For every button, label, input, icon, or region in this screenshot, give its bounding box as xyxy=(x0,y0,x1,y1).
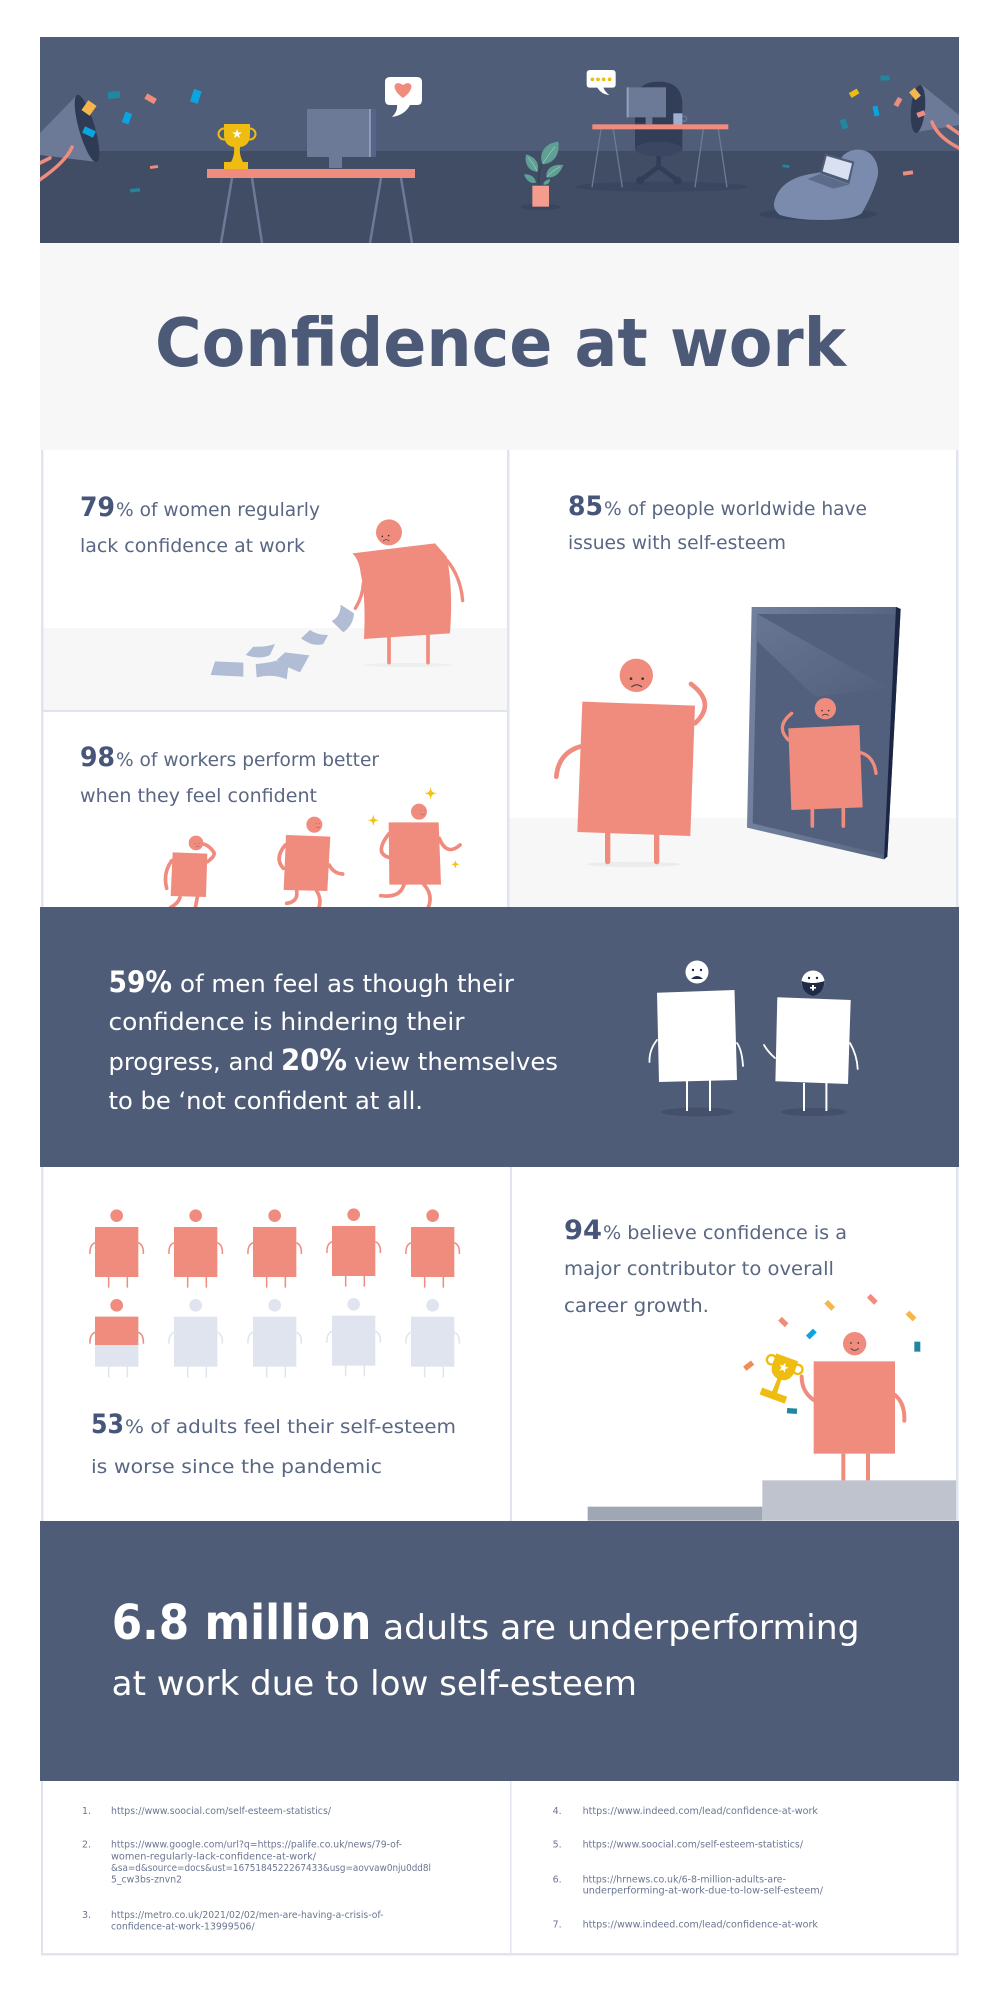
man with beard xyxy=(764,970,858,1116)
stat text: 85%: % of people worldwide have xyxy=(604,498,867,520)
panel: 98% of workers xyxy=(43,712,507,907)
stat text: 79% xyxy=(80,492,320,557)
references left column xyxy=(82,1806,431,1933)
podium xyxy=(588,1480,956,1521)
figures: three growing characters xyxy=(165,788,460,907)
mirror xyxy=(747,607,901,859)
stat text: 53%: % of adults feel their self-esteem xyxy=(125,1416,456,1438)
stat text: 79%: 79 xyxy=(80,492,115,523)
stat text: 6.8 million: adults are underperforming xyxy=(383,1608,860,1648)
second desk with chair xyxy=(592,82,728,188)
references left column: 3. xyxy=(82,1910,91,1921)
stat text: 98%: 98 xyxy=(80,742,115,773)
banner: office illustration xyxy=(38,37,961,243)
panel: title xyxy=(40,243,959,450)
stat text: 53% xyxy=(91,1409,456,1478)
panel: references xyxy=(41,1781,958,1956)
stat text: 59% and 20%: to be ‘not confident at all. xyxy=(108,1087,423,1115)
references right column: https://www.soocial.com/self-esteem-statistics/ xyxy=(583,1840,804,1851)
confetti xyxy=(743,1294,920,1414)
stat text: 59% and 20%: confidence is hindering their xyxy=(108,1008,465,1036)
title: Confidence at work xyxy=(155,304,847,382)
stat text: 79%: % of women regularly xyxy=(116,499,320,521)
stat text: 94%: career growth. xyxy=(564,1295,709,1317)
references left column: 5_cw3bs-znvn2 xyxy=(111,1875,182,1886)
stat text: 6.8 million: at work due to low self-esteem xyxy=(112,1664,637,1704)
references right column: 6. xyxy=(553,1874,562,1885)
stat text: 79%: lack confidence at work xyxy=(80,535,305,557)
panel: 79% of women xyxy=(43,450,507,710)
beanbag with laptop xyxy=(759,150,878,220)
figure: small xyxy=(165,836,214,907)
dividers row 1 xyxy=(41,450,958,907)
desk xyxy=(207,169,415,243)
figure: dropping papers xyxy=(211,519,463,679)
stat text: 85%: 85 xyxy=(568,491,603,522)
stat text: 6.8 million xyxy=(112,1595,860,1704)
icon: left party popper xyxy=(40,94,100,182)
dividers row 2 xyxy=(41,1167,958,1521)
icon: plant and second desk and beanbag xyxy=(521,70,878,220)
stat text: 59% and 20%: progress, and xyxy=(108,1048,274,1076)
references left column: 1. xyxy=(82,1806,91,1817)
references right column: 5. xyxy=(553,1840,562,1851)
stat text: 53%: is worse since the pandemic xyxy=(91,1456,382,1478)
stat text: 85%: issues with self-esteem xyxy=(568,532,786,554)
references left column: &sa=d&source=docs&ust=1675184522267433&usg=aovvaw0nju0dd8l xyxy=(111,1863,431,1874)
right confetti xyxy=(782,76,926,176)
reflection xyxy=(782,698,876,826)
panel: 6.8 million band xyxy=(40,1521,959,1781)
stat text: 94%: 94 xyxy=(564,1215,602,1246)
character xyxy=(556,659,705,867)
icon: heart speech bubble xyxy=(385,77,422,117)
stat text: 59% and 20%: of men feel as though their xyxy=(180,970,514,998)
references left column: https://metro.co.uk/2021/02/02/men-are-having-a-crisis-of- xyxy=(111,1910,384,1921)
stat text: 59% and 20%: 59% xyxy=(108,965,172,999)
references right column: https://www.indeed.com/lead/confidence-at-work xyxy=(583,1806,818,1817)
icon: monitor xyxy=(307,109,376,168)
references left column: https://www.soocial.com/self-esteem-statistics/ xyxy=(111,1806,332,1817)
panel: 59% of men band xyxy=(40,907,959,1167)
stat text: 98% xyxy=(80,742,379,807)
stat text: 98%: when they feel confident xyxy=(80,785,317,807)
references right column: 4. xyxy=(553,1806,562,1817)
icon: right party popper xyxy=(909,84,961,149)
character xyxy=(802,1332,904,1480)
references left column: 2. xyxy=(82,1840,91,1851)
stat text: 94%: major contributor to overall xyxy=(564,1258,834,1280)
stat text: 94%: % believe confidence is a xyxy=(603,1222,847,1244)
figure: winner on podium xyxy=(588,1294,956,1521)
stat text: 85% xyxy=(568,491,867,554)
references right column: https://hrnews.co.uk/6-8-million-adults-are- xyxy=(583,1874,786,1885)
plant xyxy=(521,142,563,210)
stat text: 94% xyxy=(564,1215,847,1317)
star speech bubble xyxy=(587,70,616,95)
panel: 53% of adults xyxy=(43,1167,510,1521)
panel: 85% of people xyxy=(509,450,957,907)
stat text: 59% and 20%: view themselves xyxy=(354,1048,558,1076)
pictogram: ten people, 53% filled xyxy=(90,1208,459,1377)
references right column: 7. xyxy=(553,1920,562,1931)
references right column: underperforming-at-work-due-to-low-self-esteem/ xyxy=(583,1886,824,1897)
stat text: 98%: % of workers perform better xyxy=(116,749,379,771)
references left column: women-regularly-lack-confidence-at-work/ xyxy=(111,1851,317,1862)
panel: 94% career growth xyxy=(512,1167,957,1521)
man with moustache xyxy=(649,960,743,1116)
icon: raised trophy xyxy=(755,1351,805,1405)
figure: character at mirror xyxy=(556,607,901,867)
stat text: 53%: 53 xyxy=(91,1409,124,1440)
icon: trophy on desk xyxy=(218,124,256,169)
figure: large with sparkles xyxy=(368,788,460,907)
figure: two white men xyxy=(649,960,858,1116)
stat text: 6.8 million: 6.8 million xyxy=(112,1595,371,1651)
references right column xyxy=(553,1806,824,1931)
stat text: 59% and 20% xyxy=(108,965,558,1115)
left confetti xyxy=(81,89,202,193)
figure: medium xyxy=(279,817,343,907)
references left column: https://www.google.com/url?q=https://palife.co.uk/news/79-of- xyxy=(111,1840,402,1851)
stat text: 59% and 20%: 20% xyxy=(281,1043,347,1077)
references left column: confidence-at-work-13999506/ xyxy=(111,1922,255,1933)
references right column: https://www.indeed.com/lead/confidence-at-work xyxy=(583,1920,818,1931)
